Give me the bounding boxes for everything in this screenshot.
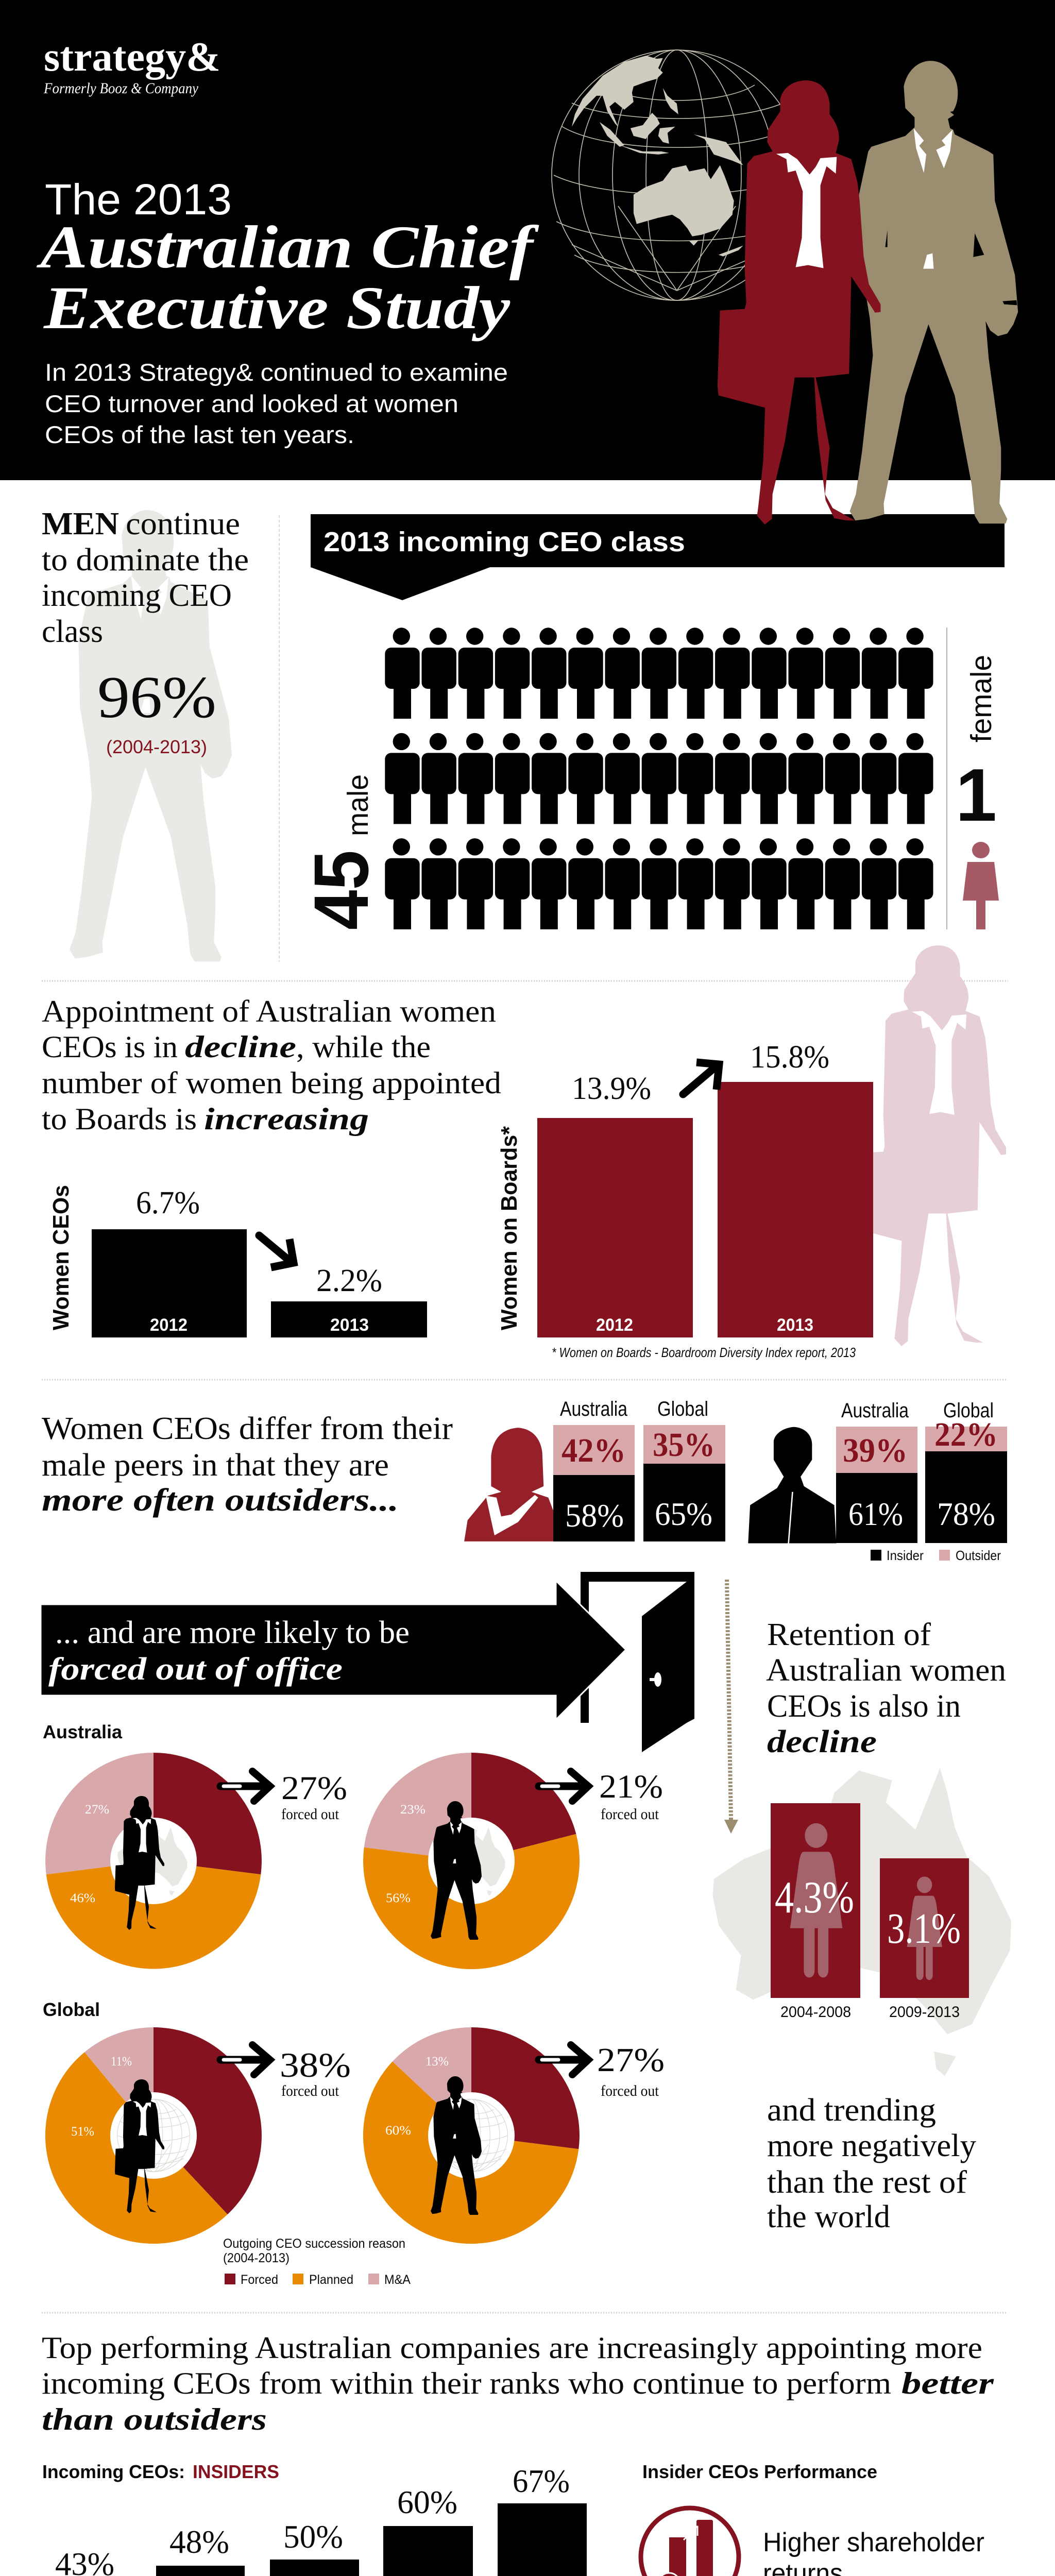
heading: women CEOs differ: male peers in that they are [42, 1448, 389, 1483]
text: higher shareholder returns [763, 2528, 984, 2576]
legend: succession reason: Outgoing CEO succession reason [223, 2236, 405, 2251]
bar chart: women on boards [497, 1040, 873, 1337]
stacked bars: male CEOs: Australia [841, 1399, 909, 1422]
stacked bars: male CEOs: 61% [848, 1496, 903, 1532]
heading: appointment: , while the [296, 1030, 431, 1064]
stacked bars: women CEOs: Australia [560, 1398, 628, 1420]
banner: 2013 incoming CEO class: 2013 incoming CEO class [324, 527, 685, 557]
label: 1 female [956, 655, 998, 837]
stacked bars: women CEOs: 58% [565, 1497, 624, 1534]
arrow: down [259, 1235, 294, 1267]
logo: strategy&: strategy& [44, 35, 220, 80]
bar chart: incoming CEOs insiders: INSIDERS [193, 2461, 279, 2482]
heading: men continue: MEN [42, 506, 119, 541]
text: retention: decline [767, 1724, 877, 1759]
text: trending [767, 2093, 976, 2234]
bar chart: women CEOs [48, 1185, 427, 1337]
dotted arrow [724, 1580, 738, 1834]
footnote: * Women on Boards - Boardroom Diversity Index report, 2013 [552, 1345, 856, 1360]
panel: men dominate incoming CEO class [42, 506, 1005, 962]
bar chart: women CEOs: Women CEOs [48, 1185, 74, 1330]
heading: appointment [42, 994, 501, 1136]
heading: women CEOs differ: Women CEOs differ from their [42, 1411, 453, 1446]
bar: 2004-2008 [771, 1803, 860, 2021]
heading: top performing [42, 2331, 994, 2436]
arrow: up [683, 1062, 719, 1094]
legend: succession reason: (2004-2013) [223, 2251, 290, 2265]
heading: top performing: better [901, 2366, 994, 2400]
pie: Australia men: 21% [599, 1768, 663, 1805]
bar chart: women CEOs: 2.2% [316, 1263, 382, 1298]
stacked bars: women CEOs [553, 1398, 725, 1541]
bar chart: women on boards: 13.9% [572, 1071, 651, 1106]
banner: 2013 incoming CEO class [311, 514, 1005, 600]
bar chart: incoming CEOs insiders: 60% [397, 2484, 457, 2520]
heading: men continue: incoming CEO [42, 578, 232, 613]
stat: 96% [97, 665, 216, 757]
pie: Australia women: 46% [70, 1891, 95, 1905]
globe [552, 50, 802, 300]
heading: top performing: incoming CEOs from within their ranks who continue to perform [42, 2366, 891, 2400]
pie: Australia women: forced out [281, 1806, 339, 1823]
text: trending: the world [767, 2199, 890, 2234]
text: retention: Australian women [766, 1653, 1006, 1688]
bar chart: women on boards: 2013 [777, 1315, 813, 1335]
heading: insider CEOs performance: Insider CEOs Performance [642, 2461, 877, 2482]
stacked bars: male CEOs: 78% [937, 1496, 995, 1532]
pie: Australia men: forced out [601, 1806, 659, 1823]
pictogram: 45 male figures [385, 628, 933, 929]
panel: header [0, 0, 1055, 480]
bar: 2004-2008: 4.3% [775, 1873, 854, 1923]
pie: Global women: forced out [281, 2082, 339, 2099]
legend: succession reason [223, 2236, 411, 2287]
text: retention: CEOs is also in [767, 1689, 961, 1724]
banner arrow: forced out of office [41, 1581, 626, 1720]
panel: women CEOs vs women on boards [42, 945, 1006, 1360]
heading: Global: Global [43, 1999, 100, 2020]
panel: retention of women CEOs [712, 1617, 1011, 2234]
pie: Australia women: 27% [85, 1803, 109, 1817]
text: trending: and trending [767, 2093, 936, 2128]
legend: insider outsider: Insider [887, 1548, 924, 1563]
label: 45 male [298, 774, 384, 930]
panel: insiders perform better [42, 2331, 994, 2576]
stacked bars: women CEOs: Global [657, 1398, 708, 1420]
label: 1 female: female [965, 655, 998, 742]
text: retention: Retention of [767, 1617, 931, 1652]
label: 45 male: male [342, 774, 375, 836]
intro text: In 2013 Strategy& continued to examine [45, 359, 508, 386]
bar chart: women on boards: 15.8% [750, 1040, 829, 1075]
heading: appointment: Appointment of Australian women [42, 994, 496, 1028]
heading: men continue [42, 506, 249, 649]
heading: men continue: continue [126, 506, 240, 541]
heading: men continue: class [42, 614, 103, 649]
text: trending: more negatively [767, 2128, 976, 2163]
pie: Global women [45, 2027, 351, 2244]
stacked bars: male CEOs [836, 1399, 1007, 1543]
icon: woman bust [464, 1428, 558, 1541]
pie: Australia men [363, 1753, 663, 1969]
title: Australian Chief [36, 213, 540, 281]
stat: 96%: 96% [97, 665, 216, 730]
heading: appointment: CEOs is in [42, 1030, 178, 1064]
pie: Australia men: 23% [400, 1803, 426, 1817]
bar chart: women CEOs: 2013 [330, 1315, 369, 1335]
figure: man [850, 61, 1018, 523]
heading: appointment: decline [185, 1030, 296, 1064]
bar chart: incoming CEOs insiders [42, 2461, 587, 2576]
bar chart: women on boards: Women on Boards* [497, 1126, 522, 1330]
legend: insider outsider: Outsider [956, 1548, 1001, 1563]
bar: 2009-2013: 2009-2013 [889, 2004, 960, 2021]
pie: Global women: 51% [71, 2125, 94, 2139]
door icon [581, 1572, 694, 1752]
pale woman silhouette [859, 945, 1006, 1346]
intro text: CEO turnover and looked at women [45, 390, 458, 417]
stacked bars: male CEOs: Global [943, 1399, 994, 1422]
heading: top performing: Top performing Australian companies are increasingly appointing more [42, 2331, 982, 2365]
pie: Australia women [45, 1753, 347, 1969]
pie: Australia women: 27% [281, 1770, 347, 1807]
bar: 2009-2013: 3.1% [887, 1905, 961, 1953]
bar chart: incoming CEOs insiders: Incoming CEOs: [42, 2461, 185, 2482]
intro text [45, 359, 508, 448]
pie: Global men: 60% [385, 2124, 411, 2138]
pie: Global men: 13% [426, 2055, 449, 2069]
heading: Australia: Australia [43, 1721, 123, 1742]
pie: Australia men: 56% [386, 1891, 411, 1905]
bar: 2009-2013 [880, 1858, 969, 2021]
hero figures: woman and man [718, 61, 1018, 524]
pie: Global women: 38% [280, 2045, 351, 2084]
bar chart: incoming CEOs insiders: 48% [169, 2523, 229, 2560]
map: Australia [712, 1768, 1011, 2076]
heading: appointment: number of women being appointed [42, 1066, 501, 1100]
stacked bars: women CEOs: 65% [655, 1496, 712, 1532]
title: Executive Study [43, 274, 511, 342]
pie: Global men: forced out [601, 2082, 659, 2099]
legend: succession reason: Planned [309, 2273, 353, 2287]
pie: Global women: 11% [111, 2055, 132, 2069]
intro text: CEOs of the last ten years. [45, 421, 354, 448]
heading: women CEOs differ: more often outsiders... [42, 1483, 399, 1518]
stacked bars: male CEOs: 39% [843, 1432, 908, 1469]
stat: 96%: (2004-2013) [106, 736, 207, 757]
heading: appointment: to Boards is [42, 1102, 197, 1136]
icon: shareholder returns [641, 2508, 739, 2576]
bar: 2004-2008: 2004-2008 [780, 2004, 851, 2021]
stacked bars: women CEOs: 35% [653, 1426, 715, 1464]
pale man silhouette [70, 510, 232, 961]
legend: succession reason: M&A [384, 2273, 411, 2287]
icon: female figure [963, 842, 999, 929]
figure: woman [718, 80, 880, 524]
text: retention [766, 1617, 1006, 1759]
title: The 2013 [45, 175, 232, 224]
stacked bars: women CEOs: 42% [561, 1432, 626, 1469]
logo: strategy&: Formerly Booz & Company [43, 80, 199, 97]
banner arrow: forced out of office: ... and are more likely to be [55, 1615, 410, 1650]
stacked bars: male CEOs: 22% [934, 1416, 998, 1453]
heading: appointment: increasing [204, 1102, 369, 1136]
icon: man bust [748, 1427, 836, 1544]
text: higher shareholder returns: Higher shareholder [763, 2528, 984, 2557]
text: trending: than the rest of [767, 2165, 967, 2200]
label: 45 male: 45 [298, 850, 384, 930]
bar chart: incoming CEOs insiders: 67% [513, 2463, 570, 2499]
panel: insiders versus outsiders [42, 1398, 1007, 1563]
pie: Global men [363, 2027, 665, 2244]
heading: top performing: than outsiders [42, 2402, 267, 2436]
banner arrow: forced out of office: forced out of office [48, 1652, 343, 1687]
label: 1 female: 1 [956, 753, 997, 837]
pie: Global men: 27% [597, 2041, 665, 2079]
legend: succession reason: Forced [241, 2273, 278, 2287]
title [36, 175, 540, 342]
bar chart: women CEOs: 2012 [150, 1315, 188, 1335]
heading: women CEOs differ [42, 1411, 453, 1518]
bar chart: women on boards: 2012 [596, 1315, 633, 1335]
legend: insider outsider [871, 1548, 1001, 1563]
bar chart: incoming CEOs insiders: 50% [283, 2518, 343, 2555]
bar chart: women CEOs: 6.7% [136, 1185, 200, 1221]
heading: men continue: to dominate the [42, 543, 249, 578]
